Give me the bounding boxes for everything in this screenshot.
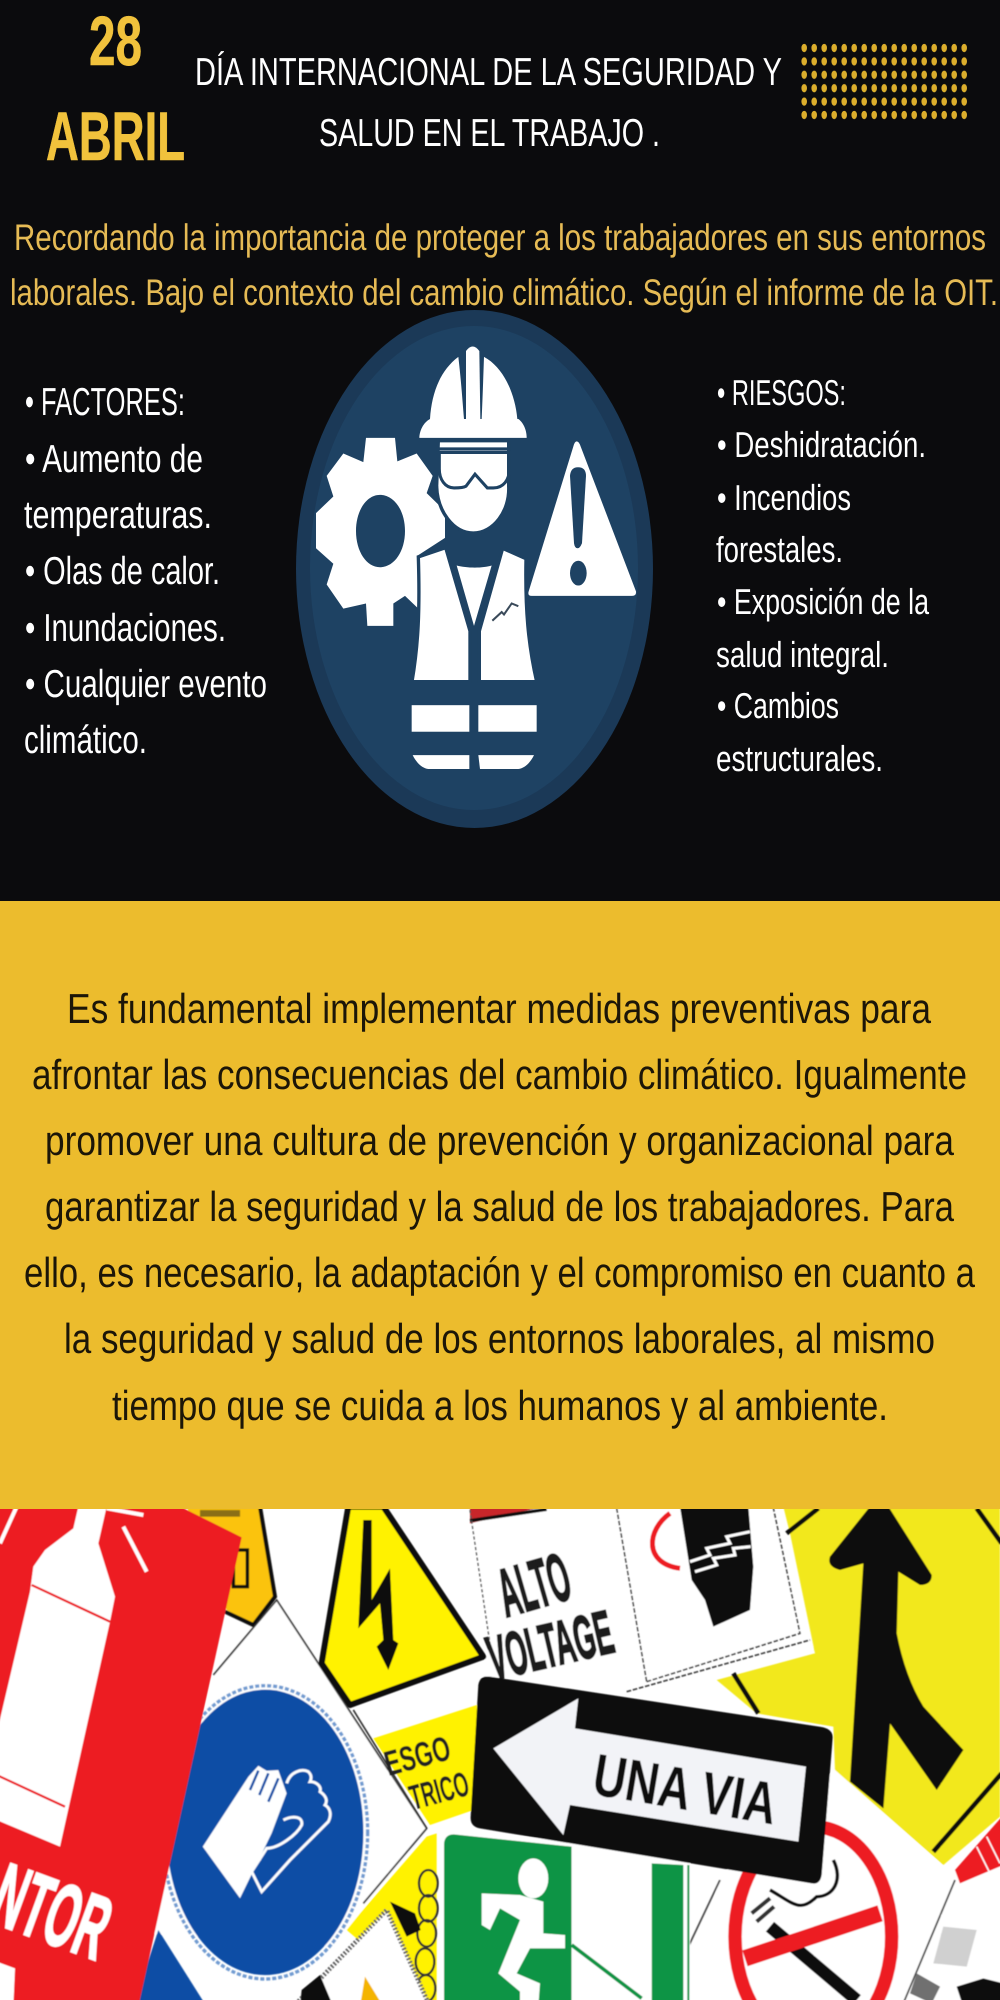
panel: yellow message <box>0 901 1000 1509</box>
intro text <box>10 217 998 313</box>
panel: dark header background <box>0 0 1000 902</box>
icon: gear <box>316 438 445 626</box>
sign: no smoking <box>687 1770 955 2000</box>
list: riesgos: estructurales. <box>716 738 883 779</box>
title <box>195 51 782 155</box>
sign: alto voltaje <box>470 1507 810 1693</box>
sign: riesgo electrico: TRICO <box>405 1764 473 1817</box>
sign: alto voltaje: ALTO <box>489 1538 579 1631</box>
sign: alto voltaje: VOLTAGE <box>481 1598 620 1693</box>
icon: helmet <box>419 347 527 438</box>
icon: running figure <box>482 1858 565 2000</box>
date: 28 abril: 28 <box>89 2 142 80</box>
list: factores: • Aumento de <box>25 438 203 481</box>
icon: face and goggles <box>437 441 510 533</box>
decorative dot grid <box>801 42 971 122</box>
list: riesgos: • Cambios <box>717 685 839 726</box>
list: riesgos: • RIESGOS: <box>717 372 846 413</box>
title: SALUD EN EL TRABAJO . <box>319 112 660 155</box>
sign: orange warning corner <box>187 1507 275 1625</box>
icon: reflective bands <box>412 705 537 769</box>
list: riesgos: • Deshidratación. <box>717 424 926 465</box>
icon: safety worker badge <box>296 310 653 828</box>
icon: vest neckline <box>457 566 492 626</box>
date: 28 abril: ABRIL <box>46 98 185 175</box>
icon: outlined glove <box>252 1770 330 1892</box>
icon: black hand with lightning <box>680 1507 753 1627</box>
list: riesgos: salud integral. <box>716 634 889 675</box>
sign: yellow merge arrow <box>717 1507 1000 1865</box>
list: riesgos: • Incendios <box>717 477 851 518</box>
sign: lower yellow chain warning <box>293 1833 438 2000</box>
list: factores: • Inundaciones. <box>25 607 226 650</box>
list: factores <box>24 381 267 762</box>
date: 28 abril <box>46 2 185 175</box>
list: riesgos: forestales. <box>716 529 843 570</box>
sign: riesgo electrico <box>353 1705 483 1828</box>
icon: vest <box>412 548 537 682</box>
sign: una via: UNA VIA <box>589 1741 782 1837</box>
sign: una via <box>471 1676 833 1884</box>
icon: vest scribble <box>492 603 518 621</box>
message text <box>24 985 976 1429</box>
sign: high voltage triangle <box>322 1507 483 1705</box>
sign: green emergency exit <box>440 1830 690 2000</box>
title: DÍA INTERNACIONAL DE LA SEGURIDAD Y <box>195 51 782 94</box>
list: factores: • Olas de calor. <box>25 550 220 593</box>
icon: warning triangle <box>528 441 636 596</box>
icon: white glove <box>203 1766 287 1898</box>
sign: lower right red corner <box>903 1815 1000 2000</box>
list: factores: • FACTORES: <box>25 381 185 424</box>
list: factores: • Cualquier evento <box>25 663 267 706</box>
list: factores: climático. <box>24 719 147 762</box>
sign: blue gloves diamond <box>133 1600 427 2000</box>
icon: white left arrow <box>493 1698 806 1842</box>
panel: safety signs collage <box>0 1507 1000 2000</box>
list: factores: temperaturas. <box>24 494 212 537</box>
icon: red curved arrow <box>652 1513 680 1568</box>
list: riesgos <box>716 372 930 779</box>
list: riesgos: • Exposición de la <box>717 581 930 622</box>
sign: red fire extinguisher <box>0 1507 242 2000</box>
sign: riesgo electrico: ESGO <box>380 1728 455 1783</box>
